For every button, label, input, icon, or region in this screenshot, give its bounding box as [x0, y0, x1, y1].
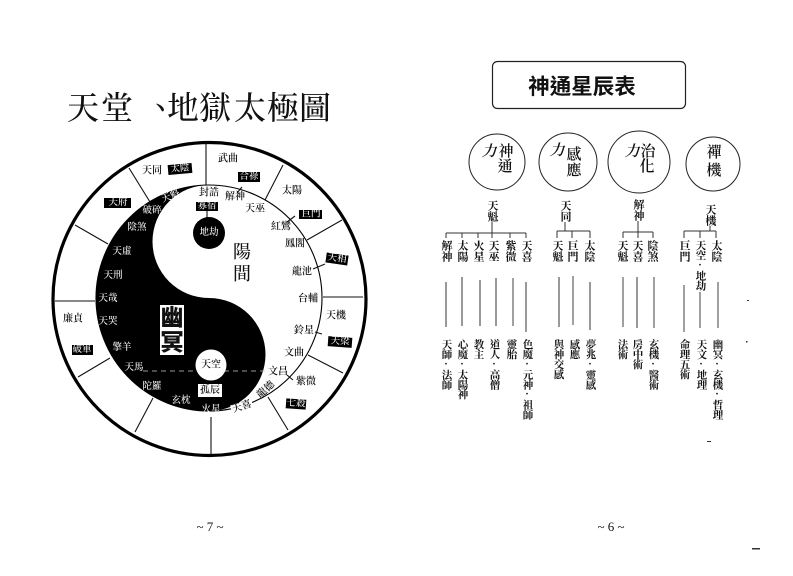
result labels: 法術: [616, 338, 628, 360]
inner ring star labels on white: 龍池: [292, 264, 312, 278]
circle: 神通力: 神: [498, 143, 514, 160]
tree: 天魁 group: 紫微: [504, 239, 516, 263]
inner ring star labels on white: 鳳閣: [285, 238, 305, 250]
inner ring star labels on black: 破碎: [142, 204, 162, 216]
inner ring star labels on black: 陀羅: [142, 380, 162, 392]
title: heaven and hell taiji diagram: 圖: [299, 90, 331, 126]
tree: 解神 group: 天魁: [616, 240, 628, 263]
scan specks: [707, 300, 760, 550]
title: heaven and hell taiji diagram: 太: [234, 90, 266, 126]
tree: 天同 group: 天同: [559, 200, 572, 222]
black tag labels: 天梁: [330, 334, 350, 348]
circle: 神通力: 通: [497, 158, 513, 175]
label: 陽間: [233, 242, 251, 284]
result labels: 靈胎: [505, 338, 517, 360]
title: heaven and hell taiji diagram: 、: [145, 90, 177, 126]
circle: 神通力: [469, 134, 525, 190]
tree: 天機 group: 天空·地劫: [694, 240, 706, 291]
tree: 解神 group: 解神: [632, 198, 644, 222]
tree: 天魁 group: 天魁: [486, 200, 498, 223]
outer ring star labels: 天機: [326, 308, 347, 322]
label: 地劫 black circle: 地劫: [199, 226, 219, 238]
tree: 天魁 group: [440, 200, 532, 263]
label: 天空 white circle: 天空: [201, 358, 221, 370]
label: 幽冥 white box: [160, 304, 184, 355]
title: heaven and hell taiji diagram: [67, 90, 331, 126]
label: 孤辰 white box: [198, 383, 222, 397]
tree: 天魁 group: 太陽: [456, 239, 468, 263]
result labels: 道人·高僧: [488, 338, 500, 390]
tree: 天魁 group: 解神: [440, 239, 452, 263]
inner ring star labels on white: 文昌: [268, 364, 288, 378]
tree: 天魁 group: 火星: [472, 240, 484, 262]
black tag labels: 天相: [327, 251, 348, 265]
tree: 解神 group: 天喜: [631, 240, 644, 263]
result labels: 感應: [568, 338, 580, 360]
result labels: 與神交感: [552, 338, 564, 380]
tree: 解神 group: 陰煞: [646, 239, 658, 263]
tree: 天同 group: 太陰: [583, 239, 596, 263]
inner ring star labels on white: 文曲: [284, 346, 304, 358]
result labels: 玄機·醫術: [647, 338, 659, 390]
inner ring star labels on white: 天巫: [245, 202, 266, 214]
label: 孤辰 white box: 孤辰: [200, 383, 220, 396]
outer ring star labels: 紫微: [296, 374, 316, 388]
tree: 天魁 group: 天喜: [520, 240, 532, 263]
inner ring star labels on white: 解神: [225, 190, 245, 202]
inner ring star labels on black: 天虛: [112, 245, 132, 257]
sector dividers: [55, 143, 363, 455]
inner ring star labels on white: 鈴星: [294, 324, 314, 336]
title: heaven and hell taiji diagram: 天: [67, 90, 99, 126]
title: heaven and hell taiji diagram: 獄: [199, 90, 231, 126]
tree: 天魁 group: 天巫: [487, 240, 500, 262]
connector lines: [446, 276, 718, 332]
result labels: [440, 338, 723, 421]
inner ring star labels on black: 火星: [201, 403, 221, 415]
outer ring star labels: 武曲: [218, 152, 238, 164]
tree: 天同 group: [551, 200, 596, 263]
inner ring star labels on white: 天喜: [230, 397, 253, 415]
circle: 治化力: [608, 131, 670, 193]
yin half of the taiji: [96, 185, 266, 411]
inner ring star labels on black: 玄枕: [171, 394, 191, 406]
circle: 感應力: 感: [566, 146, 582, 163]
outer ring star labels: 太陽: [282, 184, 302, 196]
inner ring star labels on black: 天哭: [98, 316, 118, 327]
inner ring star labels on white: 紅鸞: [271, 220, 291, 232]
circle: 治化力: 治: [640, 143, 656, 160]
inner ring star labels on black: 天哉: [98, 292, 118, 304]
inner ring star labels on black: 天刑: [103, 269, 123, 281]
inner ring star labels on white: 封誥: [199, 186, 219, 198]
outer ring star labels: 廉貞: [63, 312, 84, 324]
circle: 禪機: 禪: [706, 144, 722, 161]
label: 幽冥 white box: 冥: [160, 329, 184, 355]
title: heaven and hell taiji diagram: 極: [267, 90, 299, 126]
tree: 天機 group: 巨門: [678, 239, 690, 263]
inner ring star labels on black: 天魁: [160, 187, 182, 205]
tree: 天機 group: 天機: [704, 204, 716, 227]
outer ring star labels: 天同: [142, 164, 162, 176]
inner ring star labels on white: 龍德: [254, 377, 278, 401]
result labels: 房中術: [632, 338, 643, 370]
outer ring: [53, 142, 366, 456]
inner ring star labels on black: [98, 187, 221, 415]
tree: 天同 group: 巨門: [566, 239, 578, 263]
black tag labels: 寡宿: [197, 200, 217, 212]
tree: 解神 group: [616, 198, 658, 263]
page number 7: ~ 7 ~: [196, 519, 224, 534]
dashed horizon line: [143, 370, 267, 372]
inner ring star labels on black: 天馬: [124, 362, 144, 373]
tree: 天同 group: 天魁: [551, 240, 564, 263]
heading box: 神通星辰表: [492, 62, 686, 108]
circle: 感應力: 應: [566, 162, 582, 179]
circle: 感應力: 力: [549, 142, 565, 159]
title: heaven and hell taiji diagram: 堂: [101, 90, 133, 126]
inner ring star labels on black: 擎羊: [112, 341, 132, 353]
label: 幽冥 white box: 幽: [160, 304, 184, 330]
circle: 治化力: 化: [639, 158, 655, 175]
result labels: 天師·法師: [440, 339, 452, 390]
inner ring star labels on white: 台輔: [298, 292, 318, 304]
page number 6: ~ 6 ~: [597, 519, 625, 534]
circle: 神通力: 力: [481, 143, 497, 160]
black tag labels: 天府: [108, 196, 128, 208]
chart: taiji wheel: [53, 142, 366, 456]
result labels: 夢兆·靈感: [584, 338, 596, 390]
inner ring: [96, 185, 322, 411]
outer ring star labels: [63, 152, 347, 388]
result labels: 命理五術: [678, 338, 690, 380]
black tag labels: 七殺: [286, 396, 306, 410]
result labels: 心魔·太陽神: [456, 339, 468, 400]
black tag labels: 巨門: [301, 208, 321, 220]
circle: 感應力: [539, 133, 597, 191]
black tag labels: 破軍: [72, 343, 92, 355]
black tag labels: [72, 161, 352, 410]
label: 地劫 black circle: [193, 217, 225, 249]
result labels: 教主: [472, 338, 484, 359]
black tag labels: 合祿: [239, 170, 259, 182]
tree: 天機 group: 太陰: [710, 239, 722, 263]
label: 陽間: 間: [233, 264, 251, 284]
circle: 禪機: 機: [706, 161, 722, 179]
heading box: 神通星辰表: 神通星辰表: [528, 75, 636, 99]
tree: 天機 group: [678, 204, 722, 291]
result labels: 天文·地理: [696, 339, 707, 389]
inner ring star labels on black: 陰煞: [127, 221, 147, 233]
result labels: 幽冥·玄機·哲理: [711, 338, 723, 420]
label: 天空 white circle: [196, 350, 226, 380]
circle: 禪機: [686, 137, 740, 191]
title: heaven and hell taiji diagram: 地: [167, 90, 199, 126]
inner ring star labels on white: [199, 186, 318, 416]
black tag labels: 太陰: [170, 161, 190, 175]
circle: 治化力: 力: [624, 143, 640, 160]
label: 陽間: 陽: [233, 242, 251, 262]
result labels: 色魔·元神·祖師: [522, 338, 533, 421]
